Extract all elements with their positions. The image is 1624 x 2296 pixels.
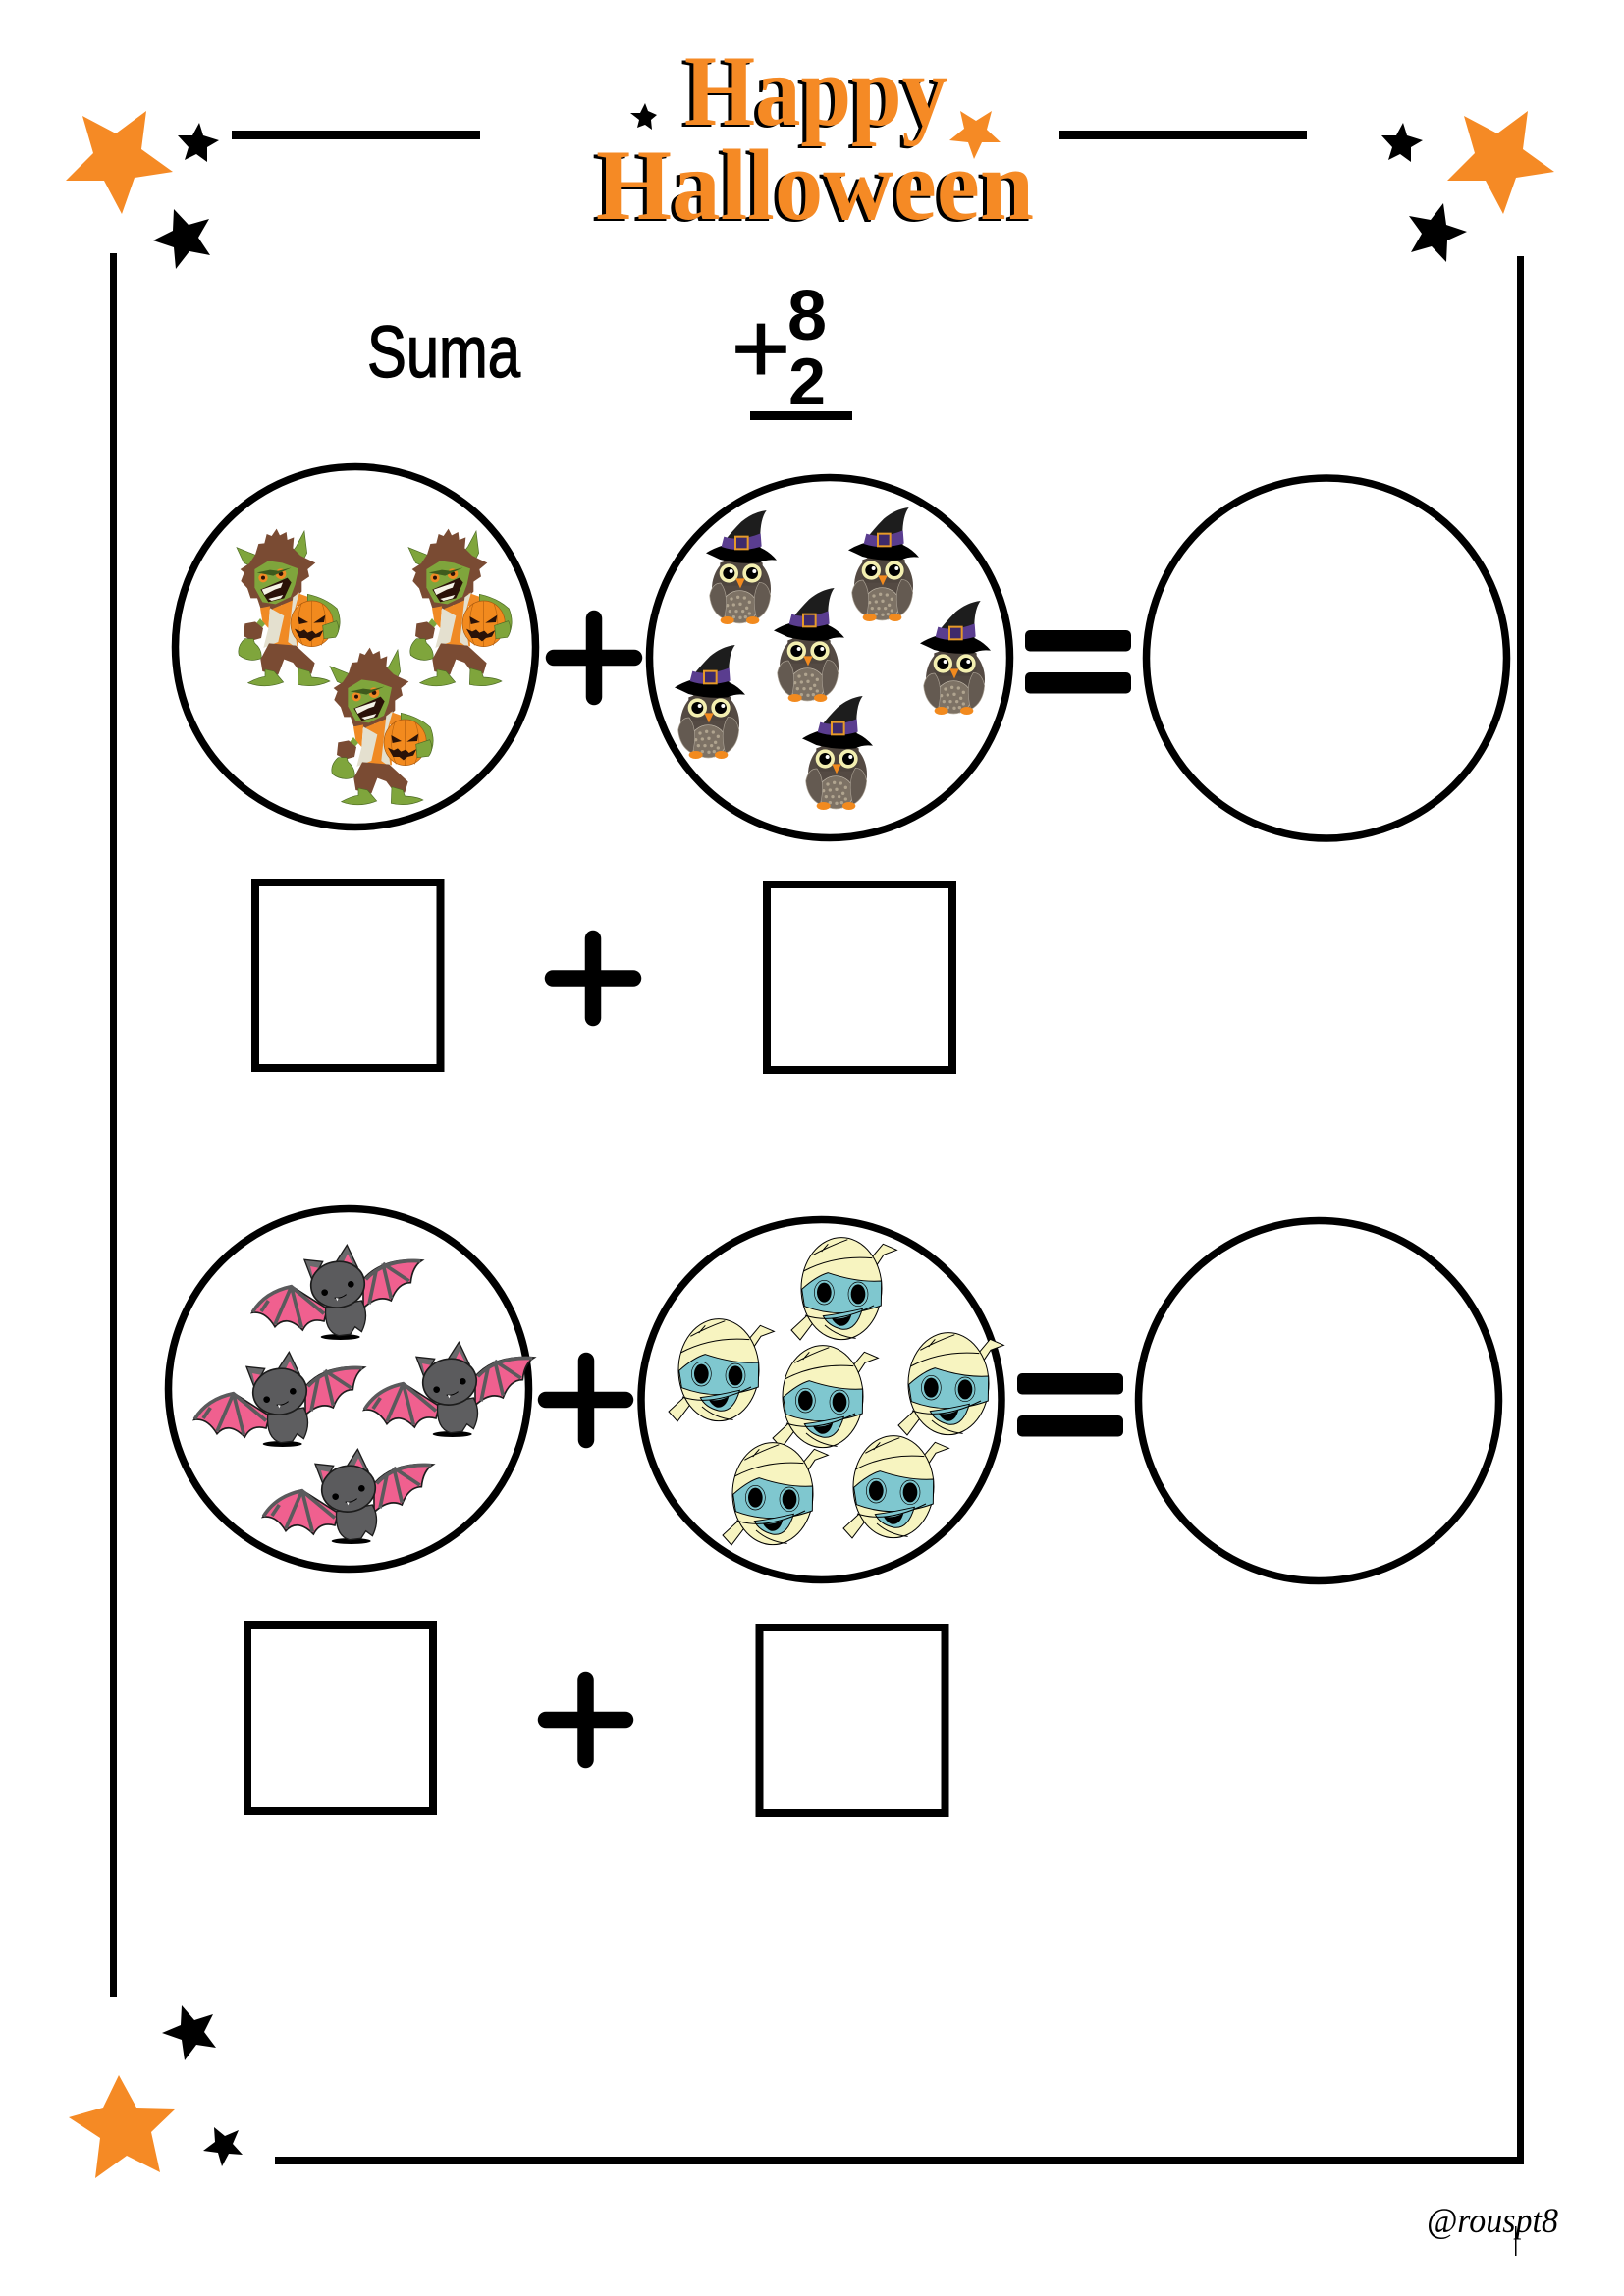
circle: goblins (175, 467, 536, 827)
answer circle (1147, 478, 1506, 838)
star: top-left large black (153, 209, 210, 269)
star: bottom-left orange (69, 2075, 176, 2178)
star: bottom-left small black (203, 2127, 243, 2166)
bat 3 (364, 1342, 534, 1437)
equals sign (1025, 630, 1131, 693)
plus sign (546, 1680, 625, 1760)
goblin 3 (330, 648, 433, 805)
title (596, 35, 1034, 241)
answer box left (255, 882, 440, 1068)
owl 3 (774, 588, 844, 702)
answer box left (247, 1625, 433, 1811)
star: top-left orange (66, 111, 173, 214)
mummy 5 (723, 1443, 828, 1545)
plus sign (553, 938, 633, 1018)
equals sign (1017, 1373, 1123, 1437)
example sum 8 + 2: 2 (788, 345, 826, 419)
star: top-right large black (1409, 203, 1467, 262)
mummy 1 (791, 1238, 896, 1340)
example sum 8 + 2 (731, 277, 852, 420)
owl 5 (675, 645, 745, 759)
star: bottom-left black (162, 2005, 216, 2060)
owl 2 (848, 507, 919, 621)
panel: first sum (175, 467, 1506, 1070)
bat 2 (194, 1352, 364, 1447)
mummy 3 (773, 1346, 878, 1448)
goblin 1 (237, 529, 340, 686)
circle: bats (169, 1209, 534, 1569)
mummy 4 (898, 1333, 1003, 1435)
mummy 2 (669, 1319, 774, 1421)
star: title black (630, 103, 657, 130)
answer circle (1139, 1221, 1498, 1580)
goblin 2 (408, 529, 512, 686)
owl 1 (706, 510, 777, 624)
star: title orange (949, 111, 1001, 159)
signature: @rouspt8 (1427, 2201, 1558, 2240)
bat 4 (263, 1449, 433, 1544)
example sum 8 + 2: 8 (787, 277, 827, 355)
answer box right (767, 884, 952, 1070)
mummy 6 (843, 1436, 948, 1538)
circle: owls (650, 477, 1009, 838)
answer box right (760, 1628, 945, 1813)
heading: Suma: Suma (367, 311, 521, 393)
panel: second sum (169, 1209, 1498, 1813)
star: top-right small black (1381, 123, 1423, 162)
owl 6 (802, 696, 873, 810)
star: top-left small black (178, 123, 219, 162)
star: top-right orange (1447, 111, 1554, 214)
bat 1 (252, 1245, 422, 1340)
example sum 8 + 2: + (731, 292, 790, 405)
signature (1427, 2201, 1558, 2256)
page frame (110, 131, 1524, 2164)
owl 4 (920, 601, 991, 715)
plus sign (546, 1361, 625, 1440)
title: Happy (684, 35, 947, 147)
plus sign (554, 618, 634, 697)
circle: mummies (641, 1219, 1003, 1580)
title: Halloween (596, 130, 1034, 241)
